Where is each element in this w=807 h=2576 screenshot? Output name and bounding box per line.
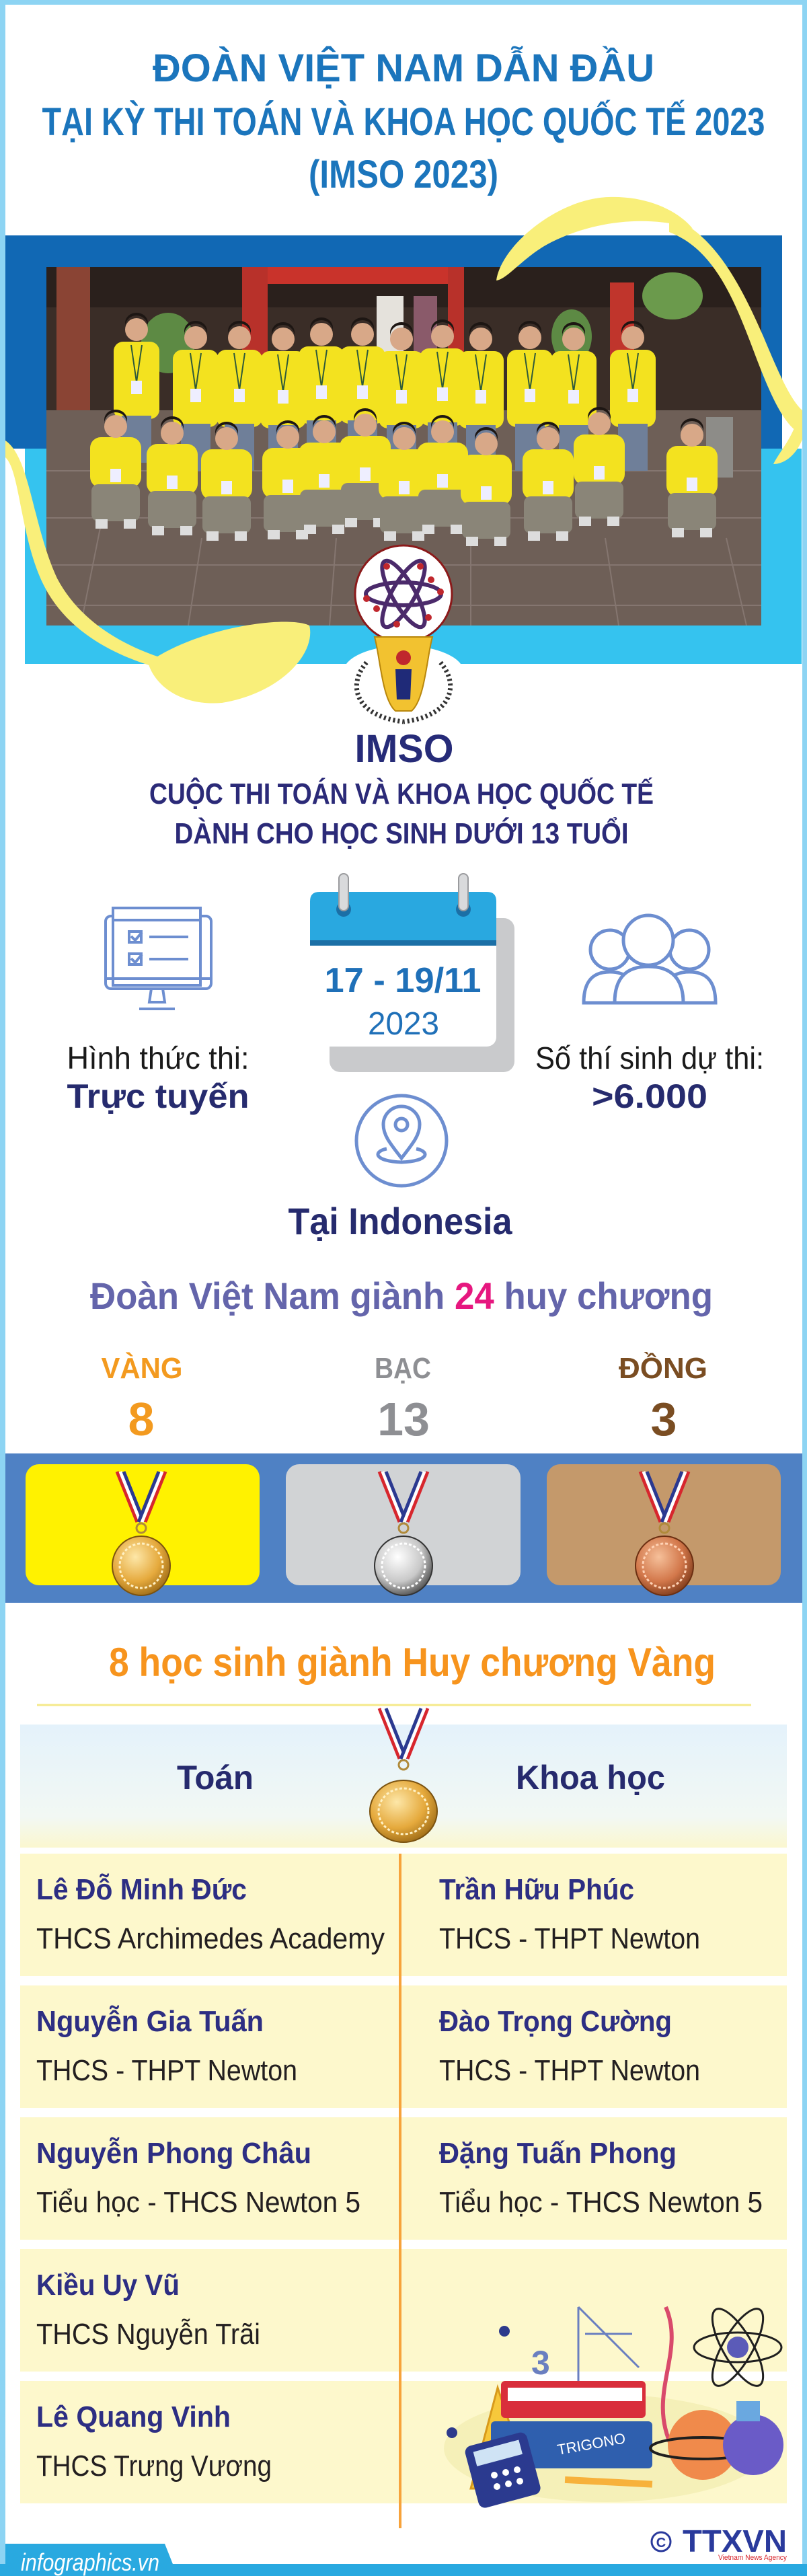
- footer: infographics.vn: infographics.vn: [21, 2548, 159, 2576]
- illustration: math & science: [444, 2302, 783, 2509]
- icon: bronze medal: [636, 1472, 693, 1595]
- icon: gold medal: [112, 1472, 170, 1595]
- text: location: Tại Indonesia: [288, 1200, 512, 1242]
- footer: infographics.vn: [0, 2544, 807, 2576]
- column: Toán winners: Nguyễn Phong Châu: [36, 2136, 311, 2170]
- icon: calendar: 2023: [368, 1006, 439, 1042]
- column: Toán winners: [36, 1872, 385, 2483]
- subtitle: [149, 776, 654, 850]
- medal counts: BẠC: [375, 1352, 431, 1385]
- text: medal total: Đoàn Việt Nam giành 24 huy chương: [90, 1275, 713, 1317]
- title: [42, 46, 765, 196]
- icon: silver medal: [375, 1472, 432, 1595]
- table header: [20, 1708, 787, 1848]
- column: Khoa học winners: THCS - THPT Newton: [439, 1922, 700, 1955]
- column: Toán winners: Kiều Uy Vũ: [36, 2269, 180, 2302]
- logo: TTXVN: C: [656, 2536, 666, 2550]
- text: contestants: Số thí sinh dự thi:: [535, 1040, 764, 1075]
- medal counts: VÀNG: [101, 1351, 183, 1385]
- text: exam format: [67, 1040, 249, 1115]
- column: Toán winners: THCS - THPT Newton: [36, 2054, 297, 2087]
- column: Toán winners: Lê Quang Vinh: [36, 2400, 231, 2433]
- medal counts: [101, 1351, 707, 1445]
- column: Toán winners: THCS Archimedes Academy: [36, 1922, 385, 1955]
- icon: calendar: [310, 874, 514, 1072]
- logo: TTXVN: TTXVN: [683, 2524, 787, 2559]
- icon: online exam monitor: [106, 908, 211, 1009]
- column: Khoa học winners: Tiểu học - THCS Newton 5: [439, 2186, 763, 2219]
- icon: IMSO logo: [355, 545, 452, 722]
- column: Toán winners: Nguyễn Gia Tuấn: [36, 2004, 264, 2038]
- table header: Khoa học: [516, 1759, 665, 1796]
- column: Toán winners: THCS Nguyễn Trãi: [36, 2318, 260, 2351]
- subtitle: CUỘC THI TOÁN VÀ KHOA HỌC QUỐC TẾ: [149, 776, 654, 810]
- icon: header medal: [370, 1708, 437, 1842]
- text: contestants: >6.000: [592, 1077, 707, 1115]
- medal counts: 8: [128, 1393, 154, 1445]
- medal counts: 13: [377, 1393, 430, 1445]
- title: (IMSO 2023): [309, 153, 498, 196]
- column: Khoa học winners: Trần Hữu Phúc: [439, 1873, 634, 1906]
- photo panel: [5, 235, 802, 699]
- photo: team: [46, 267, 761, 626]
- table header: Toán: [177, 1759, 254, 1796]
- illustration: math & science: TRIGONO: [556, 2429, 627, 2458]
- medal counts: 3: [651, 1393, 677, 1445]
- column: Khoa học winners: Đào Trọng Cường: [439, 2005, 672, 2038]
- illustration: math & science: 3: [531, 2344, 550, 2382]
- column: Toán winners: Lê Đỗ Minh Đức: [36, 1872, 247, 1906]
- decorative yellow swooshes: [5, 197, 807, 704]
- text: exam format: Trực tuyến: [67, 1077, 249, 1115]
- column: Khoa học winners: THCS - THPT Newton: [439, 2054, 700, 2087]
- subtitle: DÀNH CHO HỌC SINH DƯỚI 13 TUỔI: [175, 816, 628, 850]
- logo: TTXVN: Vietnam News Agency: [718, 2554, 787, 2562]
- icon: location: [356, 1096, 447, 1186]
- column: Toán winners: Tiểu học - THCS Newton 5: [36, 2186, 360, 2219]
- icon: calendar: 17 - 19/11: [324, 961, 482, 1000]
- column: Khoa học winners: [439, 1873, 763, 2219]
- medal cards band: [0, 1453, 807, 1603]
- title: ĐOÀN VIỆT NAM DẪN ĐẦU: [153, 46, 654, 90]
- column: Khoa học winners: Đặng Tuấn Phong: [439, 2137, 677, 2170]
- column: Toán winners: THCS Trưng Vương: [36, 2450, 272, 2483]
- text: contestants: [535, 1040, 764, 1115]
- table rows: [20, 1854, 787, 2528]
- medal counts: ĐỒNG: [619, 1351, 707, 1385]
- heading: gold medalists: 8 học sinh giành Huy chương Vàng: [109, 1640, 716, 1685]
- logo: TTXVN: [652, 2524, 787, 2562]
- text: exam format: Hình thức thi:: [67, 1040, 249, 1075]
- heading: IMSO: IMSO: [355, 727, 453, 771]
- icon: people: [584, 915, 716, 1003]
